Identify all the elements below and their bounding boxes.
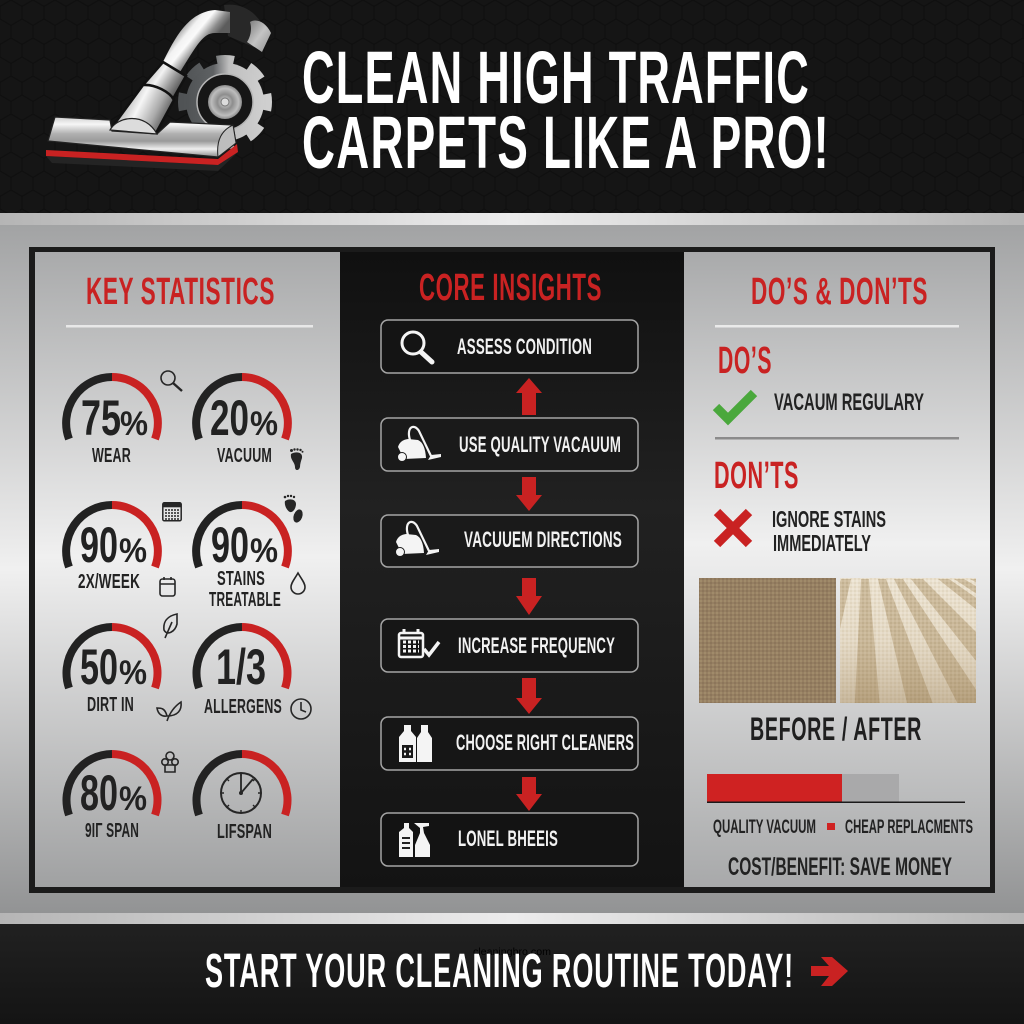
step: assess condition	[381, 320, 638, 373]
arrow: down	[516, 777, 542, 811]
step: use quality vacuum: USE QUALITY VACAUUM	[459, 432, 621, 457]
red strip	[46, 144, 238, 165]
gauge: 90% 2x/week	[66, 505, 158, 593]
icon: twin leaves	[157, 702, 181, 721]
don't item	[772, 506, 886, 556]
don't item: IMMEDIATELY	[773, 530, 871, 556]
icon: green check	[716, 393, 754, 419]
title	[302, 36, 830, 184]
step: increase frequency	[381, 619, 638, 672]
panel: core insights	[340, 252, 684, 887]
photo: carpet before	[699, 578, 836, 703]
arrow: call to action	[811, 957, 848, 986]
gauge: lifespan clock: LIFSPAN	[217, 821, 272, 843]
gauge: 20% vacuum	[196, 377, 288, 467]
step: increase frequency: INCREASE FREQUENCY	[458, 633, 615, 658]
caption: before / after: BEFORE / AFTER	[750, 711, 922, 747]
step: lonel bheeis	[381, 813, 638, 866]
gauge: 90% 2x/week: 90	[80, 517, 118, 573]
heading: key statistics: KEY STATISTICS	[86, 271, 275, 313]
icon: leaf	[164, 614, 177, 638]
gauge: 1/3 allergens	[196, 627, 288, 718]
gauge: lifespan clock	[196, 754, 288, 843]
subheading: don'ts: DON’TS	[714, 455, 799, 497]
step: choose right cleaners	[381, 717, 638, 770]
legend	[713, 817, 973, 838]
gauge: 20% vacuum: VACUUM	[217, 445, 272, 467]
gauge: 20% vacuum: %	[250, 405, 278, 443]
arrow: down	[516, 678, 542, 714]
gauge: 90% stains treatable: TREATABLE	[209, 589, 281, 611]
icon: water drop	[291, 573, 305, 594]
step: vacuuem directions	[381, 515, 638, 567]
panel: do's and don'ts	[684, 252, 1024, 887]
photo: carpet after	[840, 578, 976, 703]
bar chart: cost comparison	[707, 774, 965, 803]
icon: clock	[291, 699, 311, 719]
gear	[183, 60, 267, 144]
hose and end cap	[224, 5, 271, 52]
icon: magnifier	[161, 371, 182, 391]
gauge: 90% stains treatable	[196, 505, 288, 611]
step: lonel bheeis: LONEL BHEEIS	[458, 826, 558, 851]
header band	[0, 0, 1024, 213]
legend: QUALITY VACUUM	[713, 817, 816, 838]
neck	[110, 85, 174, 135]
gauge: 1/3 allergens: ALLERGENS	[204, 696, 282, 718]
step: choose right cleaners: CHOOSE RIGHT CLEANERS	[456, 730, 634, 755]
gauge: 50% dirt in: DIRT IN	[87, 694, 134, 716]
step: vacuuem directions: VACUUEM DIRECTIONS	[464, 527, 622, 552]
footer silver strip	[0, 913, 1024, 924]
middle collar	[143, 62, 186, 99]
head end cap	[218, 125, 236, 157]
gauge: 50% dirt in	[66, 627, 158, 716]
watermark: cleaningbro.com	[473, 946, 551, 958]
header silver strip	[0, 213, 1024, 225]
gauge: 20% vacuum: 20	[210, 390, 249, 446]
gauge: 90% 2x/week: %	[119, 532, 147, 570]
arrow: down	[516, 477, 542, 511]
icon: people group	[162, 752, 178, 772]
chrome pipe	[163, 10, 230, 72]
black base	[46, 152, 238, 171]
icon: calendar large	[163, 503, 181, 521]
gauge: 80% span: %	[119, 780, 147, 818]
gauge: 90% stains treatable: 90	[211, 517, 249, 573]
step: use quality vacuum	[381, 418, 638, 471]
gauge: 50% dirt in: 50	[80, 639, 118, 695]
gauge: 75% wear	[66, 377, 158, 467]
gauge: 50% dirt in: %	[119, 654, 147, 692]
arrow: up	[516, 378, 542, 415]
head body	[48, 117, 236, 157]
outer frame	[29, 247, 995, 893]
gauge: 1/3 allergens: 1/3	[216, 639, 266, 695]
icon: footprints pair	[284, 495, 304, 524]
gauge: 80% span: 80	[80, 765, 118, 821]
panel: key statistics	[35, 252, 340, 887]
gauge: 80% span	[66, 754, 158, 842]
heading: core insights: CORE INSIGHTS	[419, 267, 602, 309]
step: assess condition: ASSESS CONDITION	[457, 334, 592, 359]
gauge: 90% stains treatable: STAINS	[217, 568, 265, 590]
footer band	[0, 924, 1024, 1024]
gauge: 75% wear: %	[120, 405, 148, 443]
icon: vacuum head with gear	[46, 5, 271, 171]
page background: silver gradient	[0, 225, 1024, 913]
subheading: do's: DO’S	[718, 340, 772, 382]
gauge: 75% wear: WEAR	[92, 445, 131, 467]
don't item: IGNORE STAINS	[772, 506, 886, 532]
icon: footprint	[290, 448, 304, 470]
gauge: 90% 2x/week: 2X/WEEK	[78, 571, 140, 593]
do item: VACAUM REGULARY	[774, 389, 924, 416]
icon: calendar small	[160, 577, 175, 596]
icon: red cross	[717, 512, 749, 544]
gauge: 75% wear: 75	[81, 390, 121, 446]
gauge: 90% stains treatable: %	[250, 532, 278, 570]
arrow: down	[516, 578, 542, 615]
gauge: 80% span: 9IΓ SPAN	[85, 820, 139, 842]
neck dome	[110, 118, 157, 134]
